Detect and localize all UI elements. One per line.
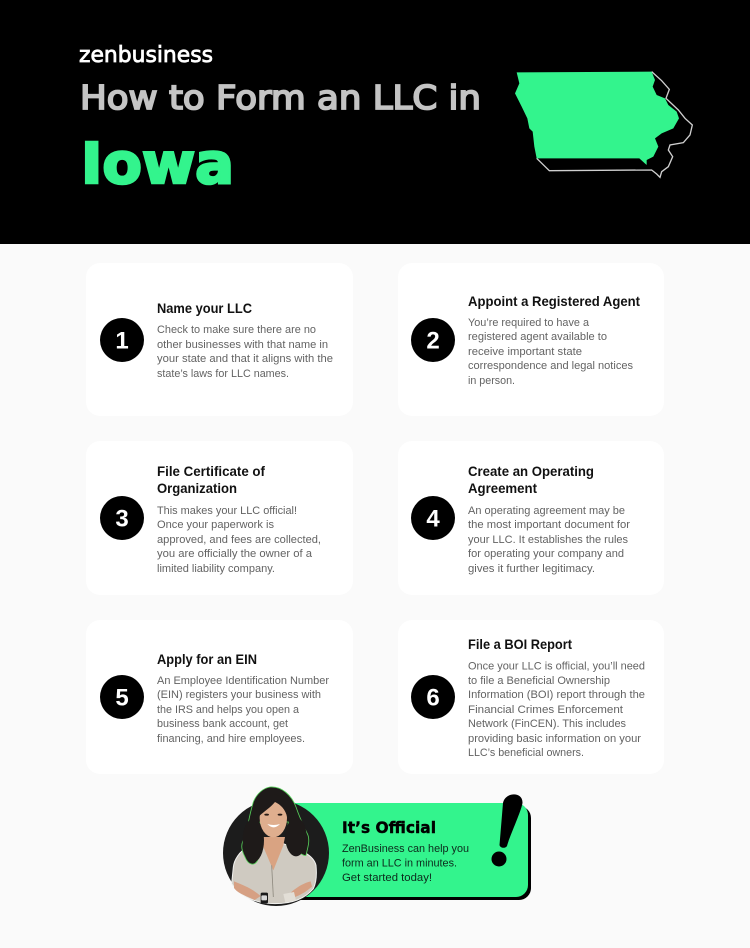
callout text [342, 843, 469, 884]
panel: step 4 [398, 441, 664, 595]
map: Iowa [515, 72, 692, 177]
step 5 text: An Employee Identification Number [157, 675, 329, 687]
step 5 text: (EIN) registers your business with [157, 689, 321, 701]
step 5 text: financing, and hire employees. [157, 733, 305, 745]
step number 2: 2 [426, 328, 440, 354]
step 4 text: gives it further legitimacy. [468, 563, 595, 575]
step 3 text: approved, and fees are collected, [157, 534, 321, 546]
panel: step 3 [86, 441, 353, 595]
step 3 text: limited liability company. [157, 563, 275, 575]
step 6 text: Information (BOI) report through the [468, 689, 645, 701]
step 2 text: in person. [468, 375, 515, 387]
callout heading: It’s Official [342, 818, 436, 837]
step number 4: 4 [426, 506, 440, 532]
step 3 text: Once your paperwork is [157, 519, 274, 531]
step 4 text: for operating your company and [468, 548, 624, 560]
step 4 heading [468, 463, 594, 496]
step 1 text [157, 324, 333, 380]
icon: exclamation mark [492, 794, 523, 866]
callout text: form an LLC in minutes. [342, 858, 457, 870]
step 2 text: correspondence and legal notices [468, 360, 633, 372]
step number 6: 6 [426, 684, 440, 712]
step 6 text: Once your LLC is official, you’ll need [468, 660, 645, 672]
step 3 heading: Organization [157, 480, 237, 496]
state name: Iowa [81, 132, 234, 197]
step 2 text: registered agent available to [468, 331, 607, 343]
step 1 heading: Name your LLC [157, 300, 252, 316]
panel: step 1 [86, 263, 353, 416]
step number 5: 5 [115, 684, 129, 712]
step 6 text: Network (FinCEN). This includes [468, 718, 626, 730]
step 6 text: Financial Crimes Enforcement [468, 704, 624, 716]
step number 1 [100, 318, 144, 362]
panel: step 6 [398, 620, 664, 774]
title: How to Form an LLC in [80, 78, 481, 117]
step 2 text: receive important state [468, 346, 582, 358]
step 6 heading: File a BOI Report [468, 636, 572, 652]
step 4 heading: Create an Operating [468, 463, 594, 479]
step 5 text: the IRS and helps you open a [157, 704, 300, 716]
step number 3: 3 [115, 506, 129, 532]
step 4 text: your LLC. It establishes the rules [468, 534, 628, 546]
step 2 text: You’re required to have a [468, 317, 590, 329]
step 4 heading: Agreement [468, 480, 537, 496]
step 1 text: other businesses with that name in [157, 339, 328, 351]
step 6 text: to file a Beneficial Ownership [468, 675, 610, 687]
step 1 text: your state and that it aligns with the [157, 353, 333, 365]
panel: step 2 [398, 263, 664, 416]
logo: zenbusiness: zenbusiness [79, 43, 213, 68]
step 3 text: This makes your LLC official! [157, 505, 297, 517]
step 5 text [157, 675, 329, 745]
callout: It's Official [223, 787, 531, 906]
step 6 text [468, 660, 645, 759]
callout text: Get started today! [342, 872, 432, 884]
callout text: ZenBusiness can help you [342, 843, 469, 855]
step 6 text: LLC’s beneficial owners. [468, 747, 584, 759]
step 3 heading: File Certificate of [157, 463, 265, 479]
step 5 text: business bank account, get [157, 718, 289, 730]
step 3 text [157, 505, 321, 575]
step 3 text: you are officially the owner of a [157, 548, 313, 560]
header band [0, 0, 750, 244]
step 1 text: state’s laws for LLC names. [157, 368, 289, 380]
step number 6 [411, 675, 455, 719]
step 6 text: providing basic information on your [468, 733, 641, 745]
step 5 heading: Apply for an EIN [157, 651, 257, 667]
step 4 text: the most important document for [468, 519, 630, 531]
step 2 heading: Appoint a Registered Agent [468, 293, 640, 309]
step 1 text: Check to make sure there are no [157, 324, 316, 336]
step 4 text [468, 505, 630, 575]
portrait [223, 787, 329, 906]
step 4 text: An operating agreement may be [468, 505, 625, 517]
callout box [282, 803, 531, 900]
step 2 text [468, 317, 633, 387]
step 3 heading [157, 463, 265, 496]
step number 5 [100, 675, 144, 719]
step number 3 [100, 496, 144, 540]
panel: step 5 [86, 620, 353, 774]
step number 2 [411, 318, 455, 362]
step number 1: 1 [115, 328, 129, 354]
step number 4 [411, 496, 455, 540]
